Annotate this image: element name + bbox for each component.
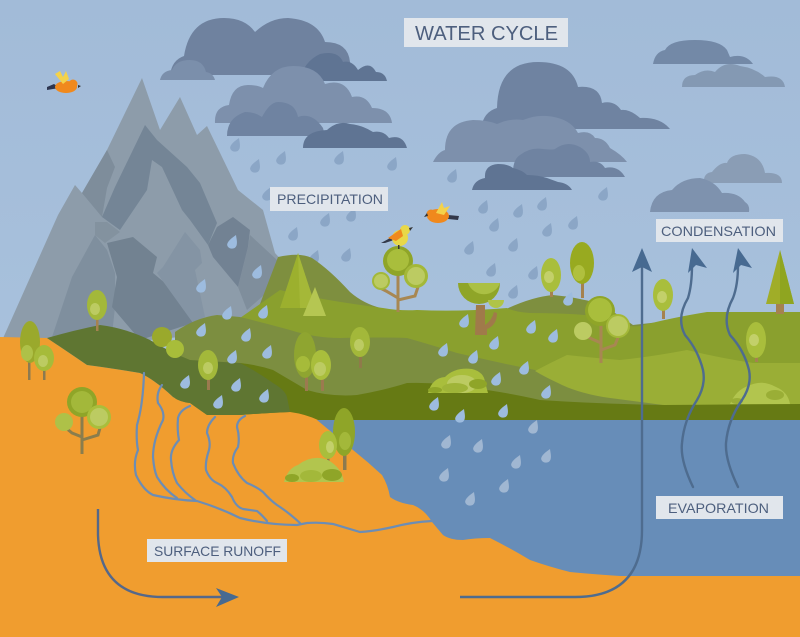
tree: three crown tree with yellow bird bbox=[372, 246, 428, 312]
bush: centre hill bbox=[428, 369, 488, 393]
orange ground bbox=[0, 337, 800, 637]
arrow: evaporation left bbox=[681, 248, 707, 487]
mountain bbox=[0, 78, 295, 345]
label: evaporation: EVAPORATION bbox=[668, 500, 769, 516]
clouds: upper left group bbox=[160, 18, 407, 148]
dark green foreground hill bbox=[47, 325, 290, 415]
rain drops over hills bbox=[180, 235, 573, 423]
surface runoff streams bbox=[135, 373, 432, 532]
bush: shoreline bbox=[284, 458, 344, 482]
label: condensation: CONDENSATION bbox=[661, 223, 776, 239]
title label bbox=[404, 18, 568, 47]
label: precipitation: PRECIPITATION bbox=[277, 191, 383, 207]
pine tree: far right bbox=[766, 250, 794, 314]
bird: orange top left bbox=[47, 71, 81, 93]
clouds: right group bbox=[650, 40, 785, 212]
clouds: centre group bbox=[433, 62, 670, 190]
lime hill layer bbox=[240, 290, 800, 420]
label: surface runoff bbox=[147, 539, 287, 562]
arrow: groundwater flow rising to condensation bbox=[460, 248, 652, 597]
bright lime hill layer bbox=[535, 350, 800, 405]
trees: left pair bbox=[20, 321, 54, 380]
sky rain drops bbox=[230, 138, 608, 299]
trees: mid hill pair bbox=[294, 332, 331, 391]
tree: lower hill bbox=[350, 327, 370, 368]
arrow: surface runoff bbox=[98, 509, 239, 607]
large pine trees bbox=[280, 253, 326, 316]
label: surface runoff: SURFACE RUNOFF bbox=[154, 543, 281, 559]
shrubs on dark hill bbox=[152, 327, 184, 358]
olive hill layer bbox=[175, 315, 665, 420]
back hills bbox=[250, 255, 660, 400]
tree: dark hill bbox=[198, 350, 218, 390]
trees: right hill ovals bbox=[541, 242, 766, 362]
dark olive band bbox=[240, 363, 800, 421]
water lake bbox=[317, 420, 800, 576]
bird: yellow on tree bbox=[381, 225, 413, 249]
trees: shoreline pair bbox=[319, 408, 355, 470]
label: condensation bbox=[656, 219, 783, 242]
tree: right three crown bbox=[574, 296, 630, 363]
tree: underground left bbox=[55, 387, 111, 454]
title label: WATER CYCLE bbox=[415, 23, 558, 45]
sky background bbox=[0, 0, 800, 420]
tree: mushroom shaped bbox=[458, 283, 504, 335]
bird: orange flying centre bbox=[424, 202, 459, 223]
bush: right lime hill bbox=[730, 383, 790, 404]
label: evaporation bbox=[656, 496, 783, 519]
rain drops over water bbox=[439, 420, 551, 506]
tree: mountain slope oval bbox=[87, 290, 107, 331]
arrow: evaporation right bbox=[726, 248, 752, 487]
label: precipitation bbox=[270, 187, 388, 211]
